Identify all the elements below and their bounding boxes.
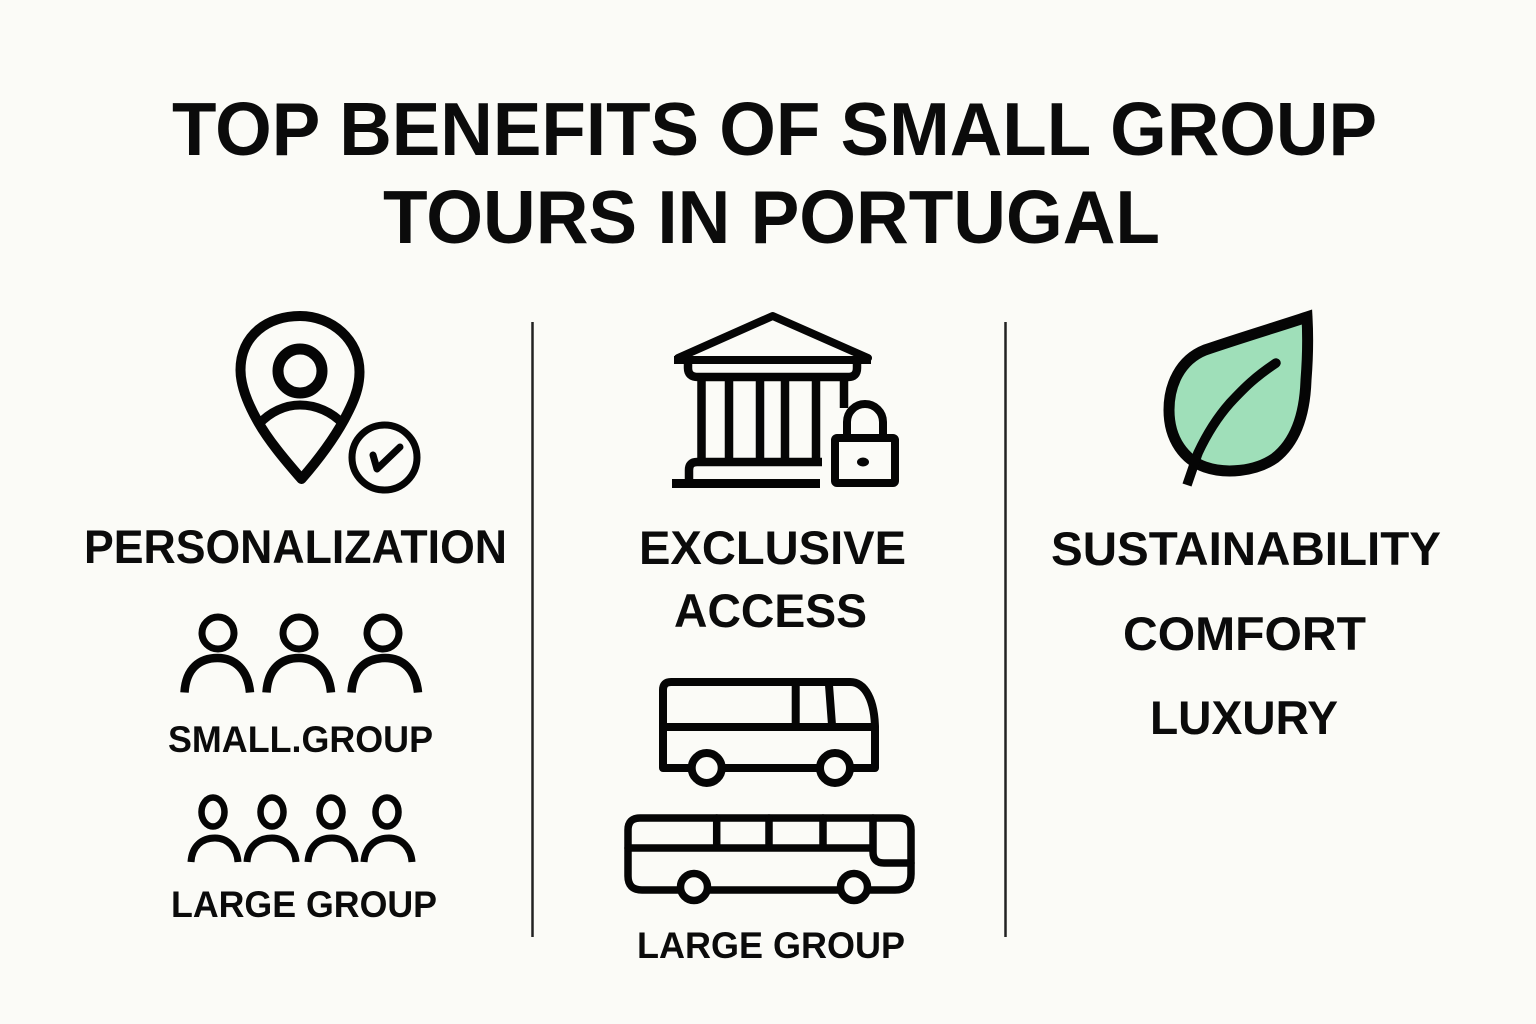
label: sustainability: SUSTAINABILITY xyxy=(1051,522,1441,575)
icon: small bus xyxy=(663,682,875,783)
label: comfort: COMFORT xyxy=(1123,607,1366,660)
label: exclusive access: ACCESS xyxy=(674,584,867,637)
icon: temple with padlock xyxy=(672,316,895,484)
icon: location pin with person and check xyxy=(240,316,417,490)
icon: large bus xyxy=(628,818,911,900)
label: large group: LARGE GROUP xyxy=(171,884,437,925)
panel: sustainability column xyxy=(1051,317,1441,744)
label: small group: SMALL.GROUP xyxy=(168,719,433,760)
panel: exclusive access column xyxy=(628,316,911,966)
label: exclusive access xyxy=(639,521,906,637)
icon: small group of three people xyxy=(184,617,418,692)
title xyxy=(172,87,1377,259)
label: large group: LARGE GROUP xyxy=(637,925,905,966)
label: exclusive access: EXCLUSIVE xyxy=(639,521,906,574)
icon: large group of four people xyxy=(191,798,412,862)
icon: green leaf xyxy=(1169,317,1308,485)
panel: personalization column xyxy=(84,316,507,925)
title: TOURS IN PORTUGAL xyxy=(383,175,1160,259)
label: luxury: LUXURY xyxy=(1150,691,1338,744)
label: personalization: PERSONALIZATION xyxy=(84,520,507,573)
title: TOP BENEFITS OF SMALL GROUP xyxy=(172,87,1377,171)
